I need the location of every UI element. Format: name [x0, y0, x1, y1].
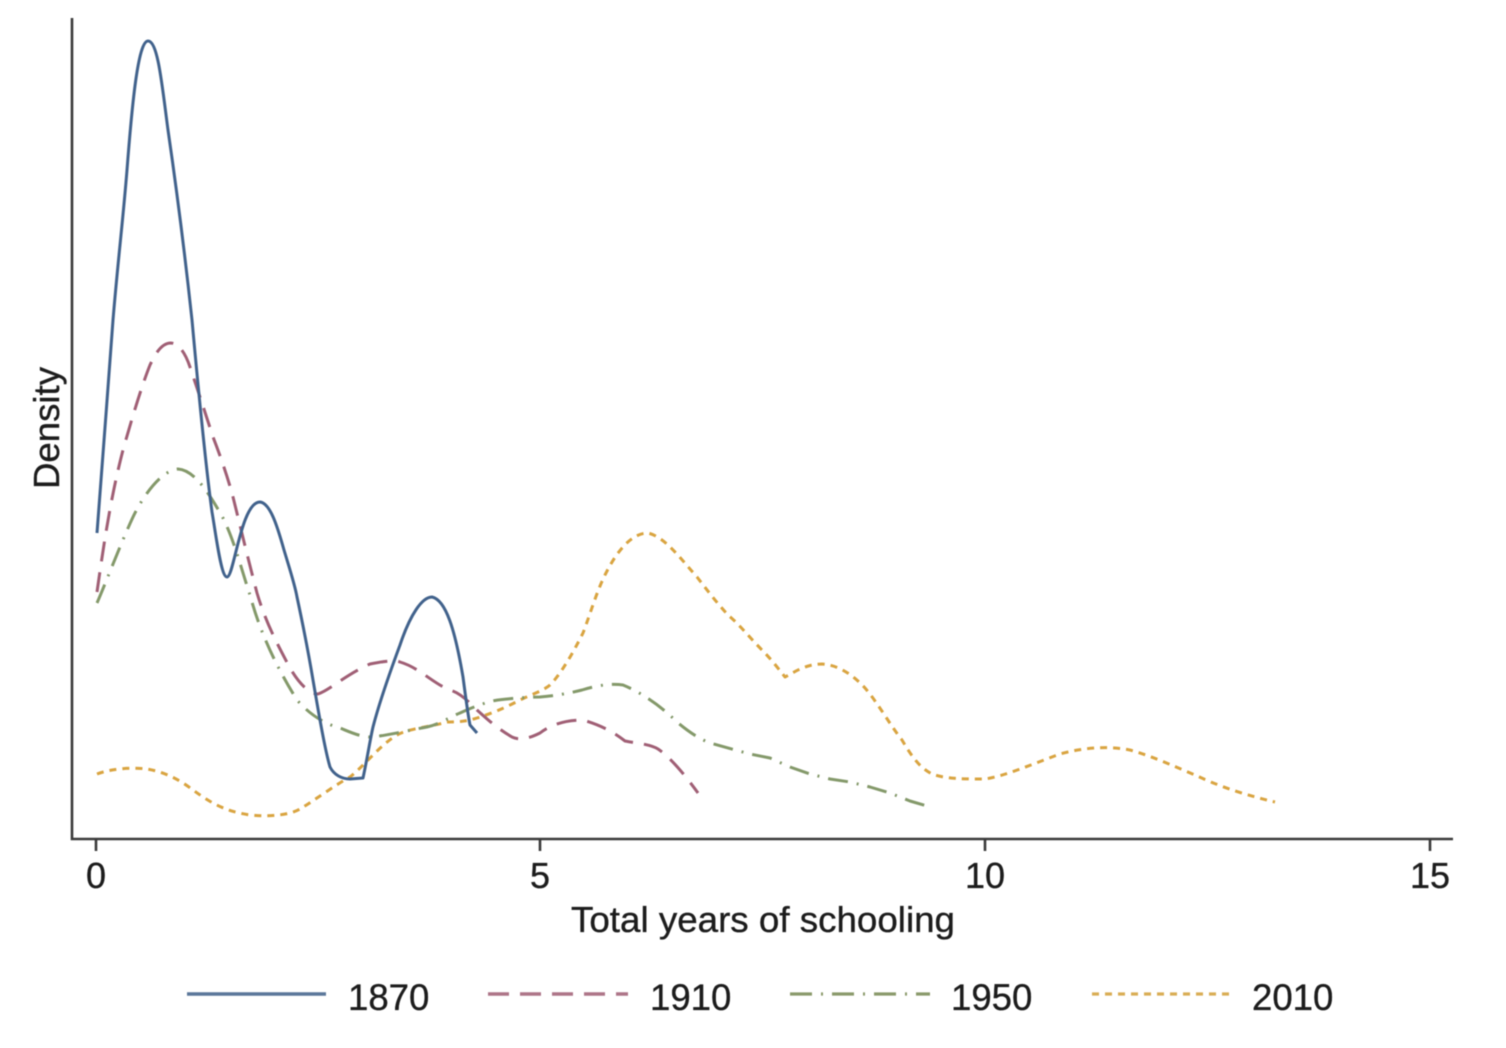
x axis tick labels: [86, 855, 1450, 896]
x axis tick labels: 5: [530, 855, 550, 896]
legend item: 1870: 1870: [348, 977, 429, 1018]
x axis tick labels: 10: [965, 855, 1005, 896]
line: 2010: [97, 533, 1275, 816]
x axis title: Total years of schooling: [571, 899, 955, 940]
line: 1870: [97, 41, 477, 779]
line: 1950: [97, 469, 927, 806]
legend item: 1910: 1910: [650, 977, 731, 1018]
x axis tick labels: 0: [86, 855, 106, 896]
axes: [72, 18, 1453, 851]
line: 1910: [97, 343, 698, 793]
y axis title: Density: [26, 367, 67, 489]
legend item: 2010: 2010: [1252, 977, 1333, 1018]
x axis tick labels: 15: [1410, 855, 1450, 896]
legend: [187, 977, 1333, 1018]
legend item: 1950: 1950: [951, 977, 1032, 1018]
